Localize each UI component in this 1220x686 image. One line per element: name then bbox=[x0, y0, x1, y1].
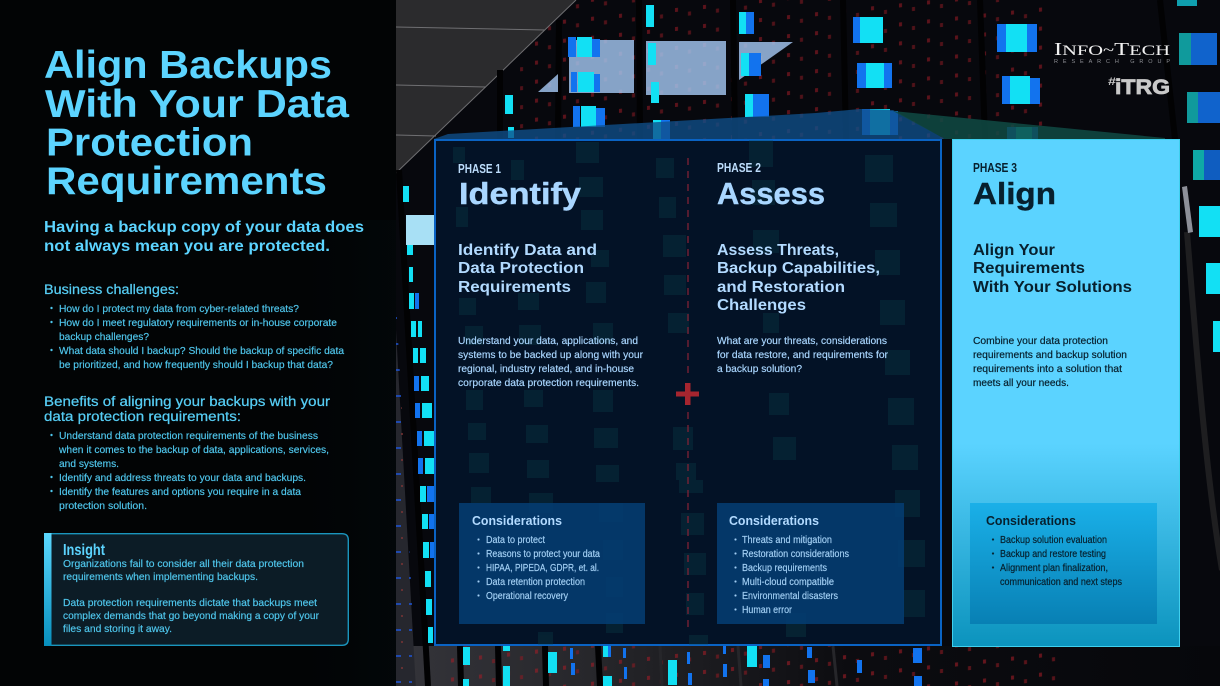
panel: phase 3 align: With Your Solutions bbox=[973, 279, 1132, 296]
callout: insight bbox=[44, 533, 348, 646]
text block: benefits: Identify the features and options you require in a data bbox=[59, 486, 301, 498]
light reflections bbox=[538, 40, 793, 95]
text block: benefits: protection solution. bbox=[59, 500, 147, 512]
considerations: phase 1: Operational recovery bbox=[486, 591, 568, 602]
panel: phase 2 assess: Assess Threats, bbox=[717, 242, 839, 259]
panel: phase 1 identify bbox=[458, 161, 645, 624]
title: Protection bbox=[46, 122, 253, 164]
text block: business challenges: be prioritized, and how frequently should I backup that data? bbox=[59, 359, 333, 371]
title bbox=[44, 44, 350, 203]
panel: phase 1 identify: Identify Data and bbox=[458, 242, 597, 259]
panel: phase 1 identify: PHASE 1 bbox=[458, 161, 501, 176]
title: Align Backups bbox=[44, 44, 332, 87]
considerations: phase 1: Considerations bbox=[472, 514, 562, 528]
panel: phase 2 assess bbox=[717, 160, 904, 624]
logo: Info-Tech Research Group bbox=[1054, 39, 1170, 65]
panel: phase 3 align: Requirements bbox=[973, 260, 1085, 277]
considerations: phase 3: communication and next steps bbox=[1000, 577, 1122, 588]
panel: phase 1 identify: Data Protection bbox=[458, 260, 584, 277]
panel: phase 3 align: requirements into a solution that bbox=[973, 363, 1122, 375]
icon: plus sign bbox=[676, 383, 699, 405]
panel: phase 1 identify: regional, industry related, and in-house bbox=[458, 363, 634, 375]
considerations: phase 2: Backup requirements bbox=[742, 563, 827, 574]
considerations: phase 1: Data retention protection bbox=[486, 577, 585, 588]
subtitle: not always mean you are protected. bbox=[44, 238, 330, 255]
panel: left sidebar background bbox=[0, 0, 396, 686]
panel: phase 2 assess: PHASE 2 bbox=[717, 160, 761, 175]
lid reflection bbox=[434, 109, 945, 139]
text block: benefits: Benefits of aligning your backups with your bbox=[44, 394, 331, 409]
text block: benefits bbox=[44, 394, 331, 512]
panel: phase 2 assess: for data restore, and requirements for bbox=[717, 349, 888, 361]
panel: phase 3 align: meets all your needs. bbox=[973, 377, 1069, 389]
text block: benefits: data protection requirements: bbox=[44, 409, 241, 424]
considerations: phase 1: Data to protect bbox=[486, 535, 545, 546]
panel: phase 1 identify: Understand your data, applications, and bbox=[458, 335, 638, 347]
text block: business challenges: Business challenges: bbox=[44, 282, 179, 297]
panel: phases 1 and 2 background bbox=[435, 140, 941, 645]
panel: phase 1 identify: corporate data protection requirements. bbox=[458, 377, 639, 389]
panel: phase 2 assess: Assess bbox=[717, 176, 825, 211]
text block: benefits: when it comes to the backup of data, applications, services, bbox=[58, 444, 329, 456]
considerations: phase 2: Considerations bbox=[729, 514, 819, 528]
considerations: phase 3: Alignment plan finalization, bbox=[1000, 563, 1108, 574]
panel: phase 3 align: Combine your data protection bbox=[973, 335, 1108, 347]
panel: phase 2 assess: and Restoration bbox=[717, 279, 845, 296]
panel: phase 1 identify: systems to be backed up along with your bbox=[458, 349, 643, 361]
title: With Your Data bbox=[45, 83, 350, 126]
text block: business challenges: What data should I backup? Should the backup of specific data bbox=[59, 345, 344, 357]
panel: phase 3 align: Align Your bbox=[973, 242, 1055, 259]
title: Requirements bbox=[46, 160, 327, 203]
panel: phase 3 align: PHASE 3 bbox=[973, 160, 1017, 175]
text block: business challenges: How do I protect my data from cyber-related threats? bbox=[59, 303, 299, 315]
considerations: phase 2: Human error bbox=[742, 605, 793, 616]
text block: business challenges: backup challenges? bbox=[59, 331, 149, 343]
panel: phase 2 assess: Challenges bbox=[717, 297, 806, 314]
callout: insight: requirements when implementing backups. bbox=[63, 571, 258, 583]
considerations: phase 1 bbox=[459, 503, 645, 624]
text block: business challenges bbox=[44, 282, 344, 371]
considerations: phase 3 bbox=[970, 503, 1157, 624]
subtitle bbox=[44, 219, 364, 255]
logo: #iTRG: iTRG bbox=[1115, 76, 1170, 99]
callout: insight: complex demands that go beyond making a copy of your bbox=[63, 610, 319, 622]
text block: benefits: Identify and address threats to your data and backups. bbox=[59, 472, 306, 484]
logo: Info-Tech Research Group: RESEARCH GROUP bbox=[1054, 59, 1170, 65]
panel: phase 3 align bbox=[952, 140, 1180, 646]
panel: phase 1 identify: Identify bbox=[459, 176, 582, 211]
considerations: phase 3: Considerations bbox=[986, 514, 1076, 528]
considerations: phase 2: Threats and mitigation bbox=[742, 535, 832, 546]
considerations: phase 1: Reasons to protect your data bbox=[486, 549, 600, 560]
callout: insight: Organizations fail to consider all their data protection bbox=[63, 558, 304, 570]
panel: phase 2 assess: a backup solution? bbox=[717, 363, 802, 375]
considerations: phase 2: Multi-cloud compatible bbox=[742, 577, 834, 588]
considerations: phase 1: HIPAA, PIPEDA, GDPR, et. al. bbox=[486, 563, 599, 574]
panel: phase 1 identify: Requirements bbox=[458, 279, 571, 296]
panel: phase 3 align: Align bbox=[973, 176, 1056, 211]
considerations: phase 2: Restoration considerations bbox=[742, 549, 849, 560]
considerations: phase 3: Backup solution evaluation bbox=[1000, 535, 1107, 546]
considerations: phase 2 bbox=[717, 503, 904, 624]
logo: Info-Tech Research Group: INFO~ T ECH bbox=[1054, 39, 1170, 59]
panel: phase 3 align: requirements and backup solution bbox=[973, 349, 1127, 361]
panel: phase 2 assess: Backup Capabilities, bbox=[717, 260, 880, 277]
text block: benefits: and systems. bbox=[59, 458, 119, 470]
callout: insight: Data protection requirements dictate that backups meet bbox=[63, 597, 317, 609]
text block: business challenges: How do I meet regulatory requirements or in-house corporate bbox=[59, 317, 337, 329]
background: server racks photo bbox=[396, 0, 1220, 686]
panel: phase 2 assess: What are your threats, considerations bbox=[717, 335, 887, 347]
logo: #iTRG: # bbox=[1108, 76, 1116, 88]
considerations: phase 2: Environmental disasters bbox=[742, 591, 838, 602]
callout: insight: files and storing it away. bbox=[63, 623, 172, 635]
considerations: phase 3: Backup and restore testing bbox=[1000, 549, 1106, 560]
subtitle: Having a backup copy of your data does bbox=[44, 219, 364, 236]
text block: benefits: Understand data protection requirements of the business bbox=[59, 430, 318, 442]
callout: insight: Insight bbox=[63, 542, 105, 559]
